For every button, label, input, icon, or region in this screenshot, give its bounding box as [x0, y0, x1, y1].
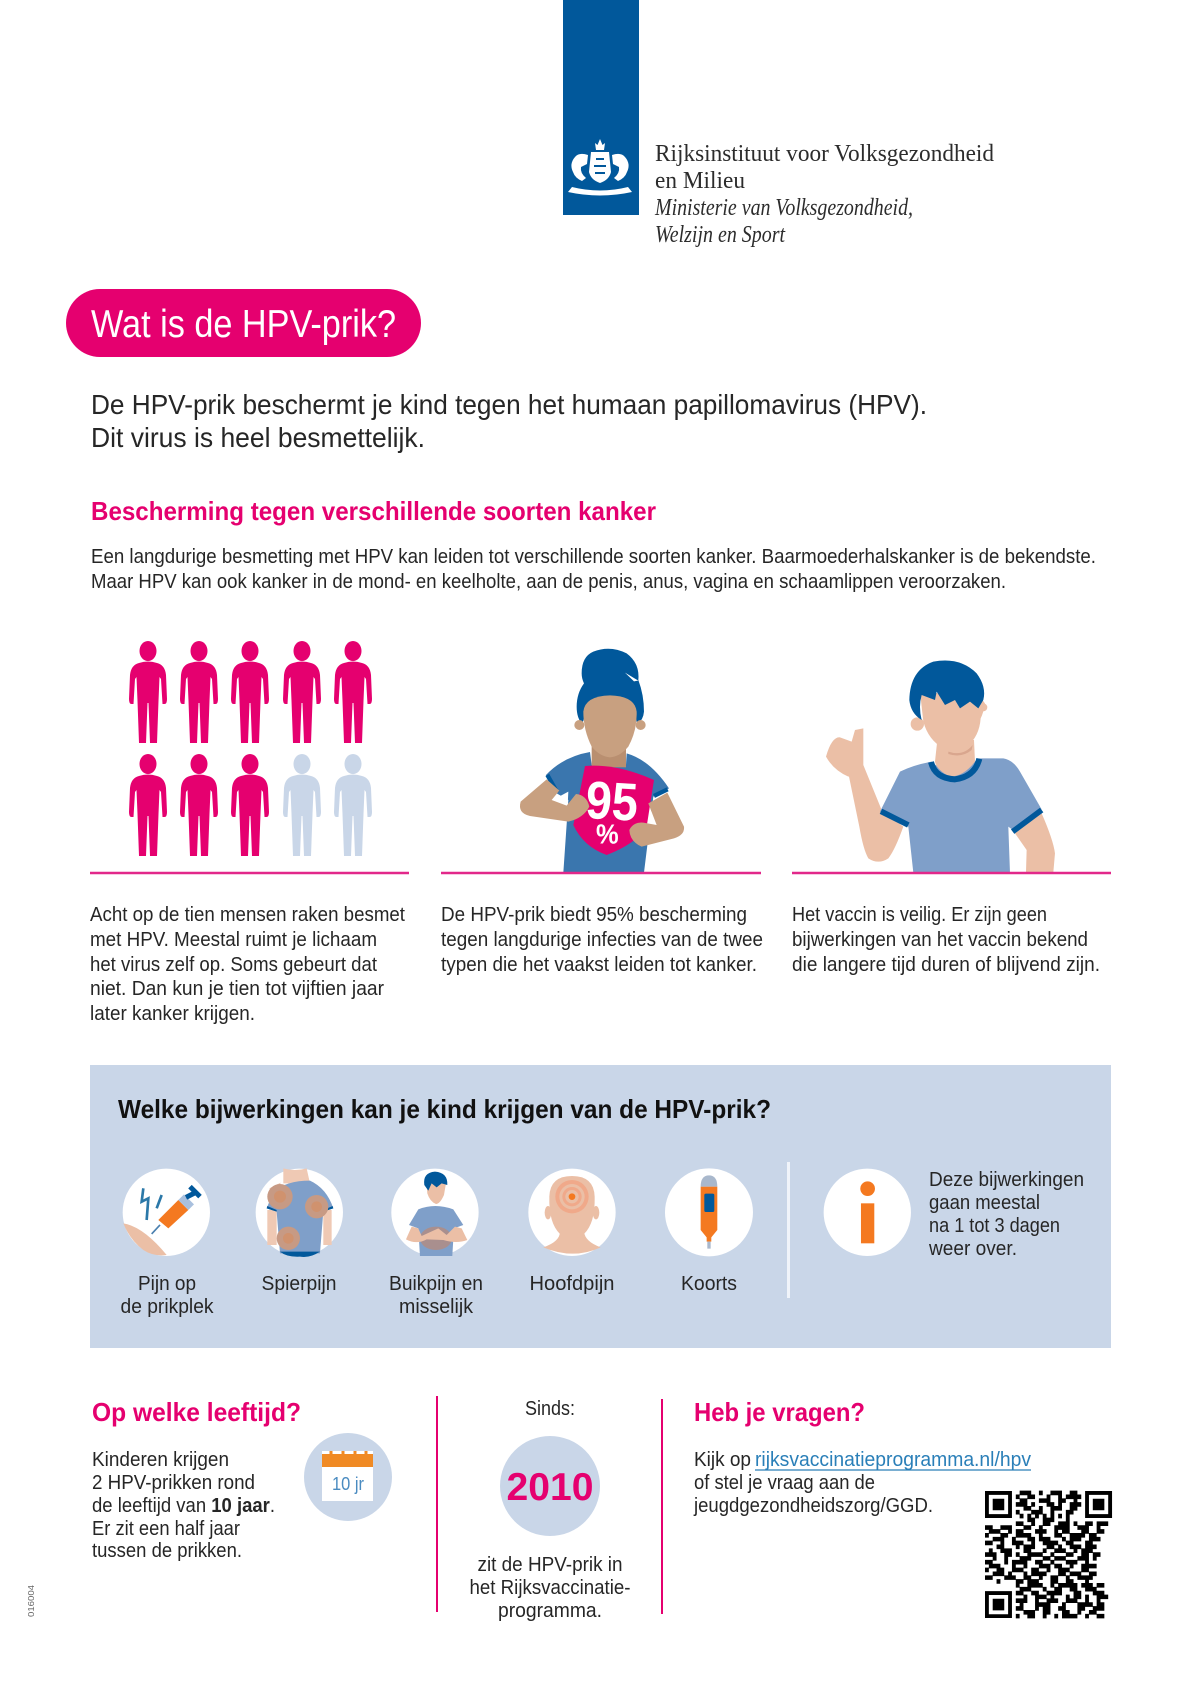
text: age: tussen de prikken. — [92, 1540, 242, 1562]
caption: 95% protection: tegen langdurige infecties van de twee — [441, 929, 763, 951]
text: questions and link: of stel je vraag aan de — [694, 1472, 875, 1494]
dividers under illustrations — [90, 872, 1111, 874]
caption: eight out of ten: Acht op de tien mensen raken besmet — [90, 904, 405, 926]
icon: headache — [528, 1169, 616, 1256]
logo: government blue bar with emblem — [563, 0, 639, 215]
illustration: girl holding 95% badge: % — [596, 818, 619, 849]
text: age: Kinderen krijgen — [92, 1449, 229, 1471]
caption: vaccine is safe: bijwerkingen van het vaccin bekend — [792, 929, 1088, 951]
since 2010 block: 2010 — [506, 1466, 594, 1509]
icon: muscle pain — [256, 1168, 343, 1257]
text: age: 2 HPV-prikken rond — [92, 1472, 255, 1494]
icon: stomach ache — [391, 1169, 479, 1256]
vertical rules — [437, 1396, 662, 1614]
text: questions and link — [693, 1449, 1031, 1517]
caption: 95% protection: De HPV-prik biedt 95% bescherming — [441, 904, 747, 926]
logo text: institute and ministry names: Welzijn en Sport — [655, 222, 786, 248]
icon: information — [824, 1169, 911, 1256]
caption: vaccine is safe: Het vaccin is veilig. Er zijn geen — [792, 904, 1047, 926]
since 2010 block: het Rijksvaccinatie- — [470, 1577, 630, 1599]
heading: age: Op welke leeftijd? — [92, 1397, 301, 1427]
text: age — [92, 1449, 275, 1562]
icon labels: Spierpijn — [262, 1273, 336, 1295]
text: questions and link: rijksvaccinatieprogramma.nl/hpv — [755, 1449, 1031, 1471]
text: age: Er zit een half jaar — [92, 1518, 240, 1540]
icon: thermometer — [665, 1168, 753, 1256]
info text: na 1 tot 3 dagen — [929, 1215, 1060, 1237]
info text — [928, 1169, 1084, 1260]
logo text: institute and ministry names: Rijksinstituut voor Volksgezondheid — [655, 141, 994, 167]
since 2010 block: programma. — [498, 1600, 602, 1622]
panel: side effects — [90, 1065, 1111, 1348]
caption: vaccine is safe — [792, 904, 1100, 976]
divider in panel — [787, 1162, 790, 1298]
logo text: institute and ministry names: Ministerie van Volksgezondheid, — [654, 195, 913, 221]
icon labels: Hoofdpijn — [530, 1273, 614, 1295]
panel heading: Welke bijwerkingen kan je kind krijgen van de HPV-prik? — [118, 1094, 771, 1124]
caption: 95% protection: typen die het vaakst leiden tot kanker. — [441, 954, 757, 976]
logo text: institute and ministry names — [654, 141, 994, 248]
icon labels: Koorts — [681, 1273, 737, 1295]
heading: questions: Heb je vragen? — [694, 1397, 865, 1427]
illustration: girl holding 95% badge — [520, 649, 684, 873]
info text: Deze bijwerkingen — [929, 1169, 1084, 1191]
icon labels: de prikplek — [120, 1296, 214, 1318]
caption: eight out of ten: later kanker krijgen. — [90, 1003, 255, 1025]
illustration: girl holding 95% badge: 95 — [584, 771, 639, 833]
icon labels — [120, 1273, 737, 1318]
illustration: boy giving thumbs up — [826, 661, 1055, 873]
intro text: Dit virus is heel besmettelijk. — [91, 422, 425, 453]
text: questions and link: jeugdgezondheidszorg/GGD. — [693, 1495, 933, 1517]
text: questions and link: Kijk op — [694, 1449, 751, 1471]
icon labels: Buikpijn en — [389, 1273, 483, 1295]
caption: vaccine is safe: die langere tijd duren of blijvend zijn. — [792, 954, 1100, 976]
since 2010 block — [470, 1398, 630, 1622]
caption: eight out of ten: met HPV. Meestal ruimt je lichaam — [90, 929, 377, 951]
info text: weer over. — [928, 1238, 1017, 1260]
heading: protection against cancer: Bescherming tegen verschillende soorten kanker — [91, 496, 656, 526]
icon labels: misselijk — [399, 1296, 474, 1318]
logo text: institute and ministry names: en Milieu — [655, 168, 745, 194]
QR code — [985, 1491, 1112, 1618]
text: age: de leeftijd van 10 jaar. — [92, 1495, 275, 1517]
intro text — [91, 389, 927, 453]
title pill — [66, 289, 421, 357]
caption: eight out of ten — [90, 904, 405, 1025]
paragraph: cancer explanation — [91, 546, 1096, 593]
icon: calendar 10 years: 10 jr — [332, 1474, 364, 1494]
caption: eight out of ten: het virus zelf op. Soms gebeurt dat — [90, 954, 377, 976]
icon: calendar 10 years — [304, 1433, 392, 1521]
icon labels: Pijn op — [138, 1273, 196, 1295]
since 2010 block: zit de HPV-prik in — [478, 1554, 622, 1576]
info text: gaan meestal — [929, 1192, 1040, 1214]
paragraph: cancer explanation: Een langdurige besmetting met HPV kan leiden tot verschillende soorten kanker. Baarmoederhalskanker is de bekendste. — [91, 546, 1096, 568]
pictogram: 8 of 10 people — [129, 641, 372, 856]
caption: 95% protection — [441, 904, 763, 976]
caption: eight out of ten: niet. Dan kun je tien tot vijftien jaar — [90, 978, 384, 1000]
side code: 016004 — [27, 1584, 36, 1617]
title pill: Wat is de HPV-prik? — [91, 303, 396, 346]
intro text: De HPV-prik beschermt je kind tegen het humaan papillomavirus (HPV). — [91, 389, 927, 420]
icon: syringe — [123, 1169, 210, 1256]
paragraph: cancer explanation: Maar HPV kan ook kanker in de mond- en keelholte, aan de penis, anus, vagina en schaamlippen veroorzaken. — [91, 571, 1006, 593]
since 2010 block: Sinds: — [525, 1398, 575, 1420]
